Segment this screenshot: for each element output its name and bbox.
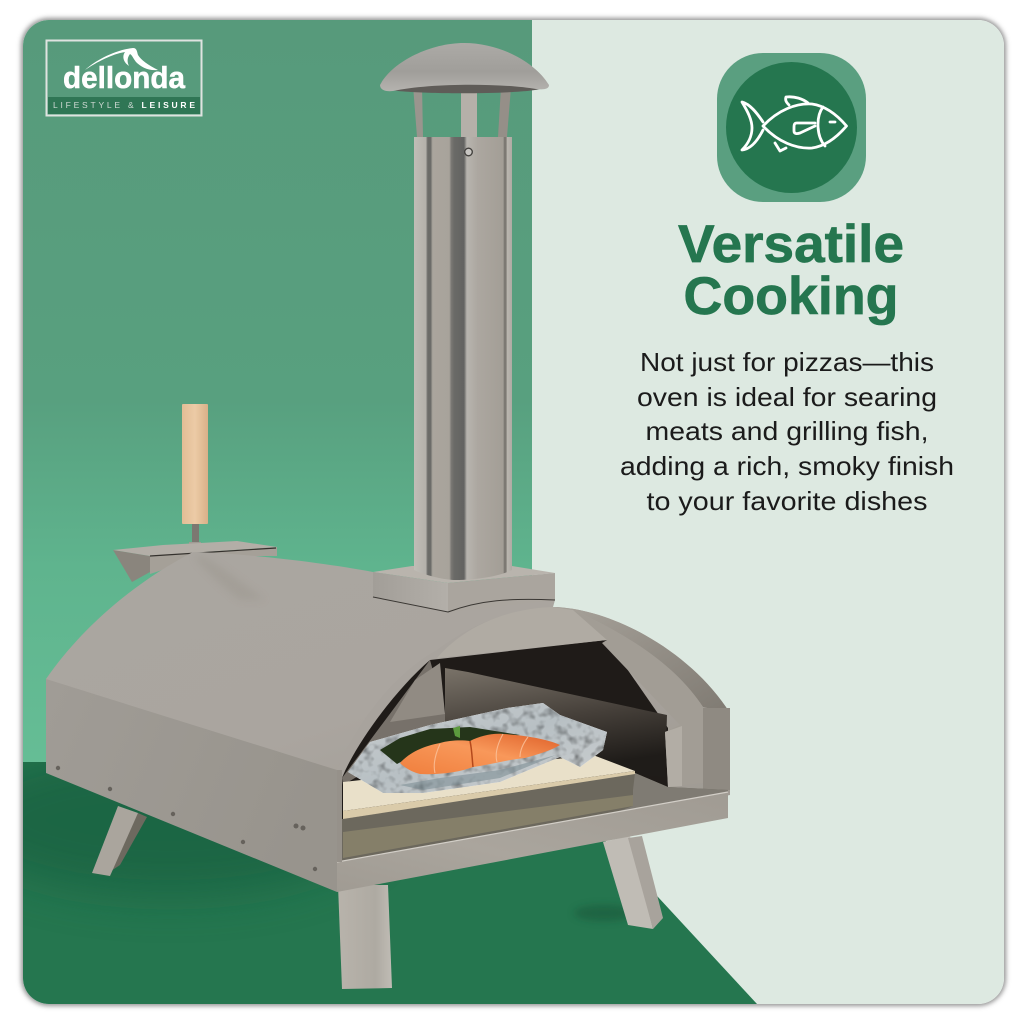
text: Cooking	[684, 267, 898, 326]
inner left wall	[342, 660, 445, 785]
rivets	[56, 766, 317, 871]
arch rim	[553, 607, 730, 713]
arch lintel	[437, 607, 607, 658]
right pillar	[573, 610, 703, 787]
body text: to your favorite dishes	[646, 486, 928, 516]
body text: Not just for pizzas—this	[640, 347, 934, 377]
wooden handle	[182, 404, 208, 549]
oven dome	[46, 552, 730, 865]
pizza stone	[343, 755, 635, 819]
dome smear highlight	[195, 555, 265, 600]
oven legs	[92, 806, 663, 989]
oven front lip	[337, 792, 728, 892]
body text: adding a rich, smoky finish	[620, 451, 954, 481]
logo: dellonda	[46, 40, 202, 116]
oven side panel	[46, 679, 337, 892]
hinged door	[113, 541, 277, 582]
logo tagline: LIFESTYLE & LEISURE	[53, 100, 195, 110]
body text: oven is ideal for searing	[637, 382, 937, 412]
icon: fish badge	[717, 53, 866, 202]
foil tray	[348, 703, 607, 793]
salmon fillet	[400, 734, 560, 774]
logo wordmark: dellonda	[63, 60, 186, 95]
pizza oven	[46, 43, 730, 989]
icon: fish	[742, 97, 846, 151]
heading: Versatile	[678, 215, 904, 274]
body text: meats and grilling fish,	[646, 416, 928, 446]
inner back wall	[445, 668, 667, 777]
dome front edge	[337, 607, 553, 790]
chimney pipe	[414, 137, 512, 580]
logo wave	[85, 48, 158, 70]
chimney base	[373, 566, 555, 612]
oven floor	[342, 773, 728, 866]
oven opening	[342, 640, 668, 865]
chimney cap	[380, 43, 549, 137]
greens	[380, 727, 520, 764]
body text	[620, 347, 954, 516]
